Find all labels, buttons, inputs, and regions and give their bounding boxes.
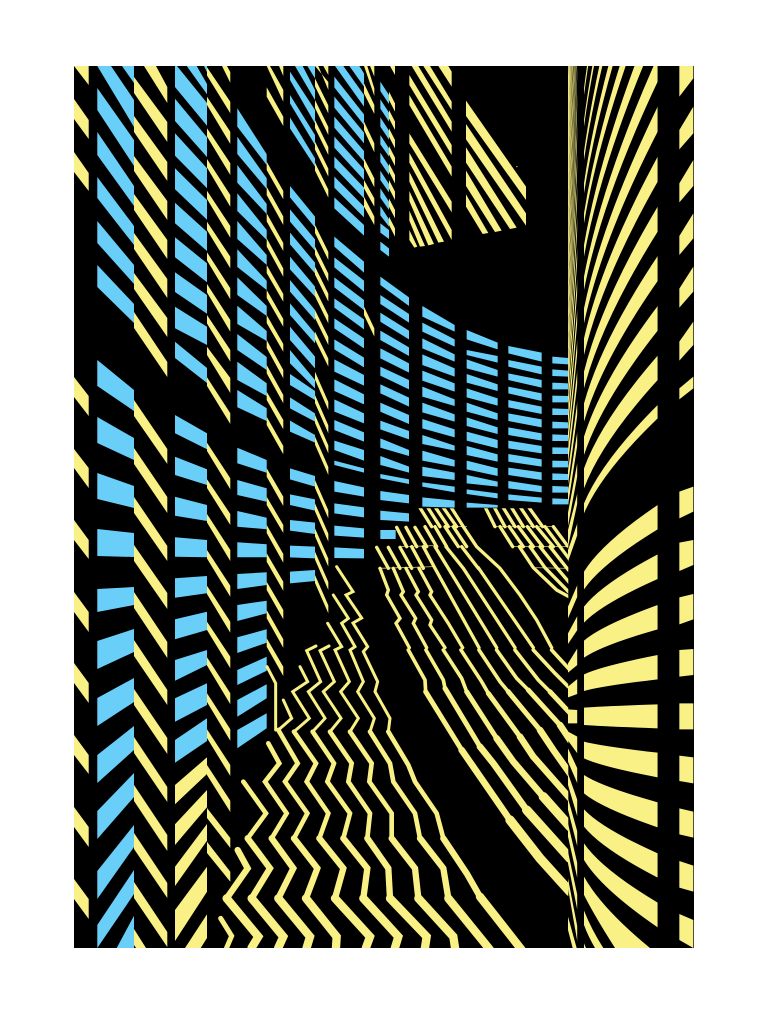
column: blue wall band 1 — [97, 66, 134, 948]
corner column: lower wedges — [568, 493, 577, 948]
column: far-left yellow stripes — [74, 66, 89, 919]
far-right yellow stripes upper — [679, 66, 693, 399]
column: thin yellow stripes band 3 — [267, 66, 283, 676]
column: thin yellow stripes band 4 upper — [315, 66, 328, 367]
column: blue wall band 7 — [422, 306, 455, 508]
column: yellow stripes band 1 — [134, 66, 167, 948]
column: yellow chevrons under blue band 2 — [175, 757, 207, 948]
column: blue wall band 4 — [290, 66, 315, 388]
column: blue wall band 6 lower — [380, 348, 409, 539]
column: thin yellow stripes band 5 — [364, 66, 395, 337]
upper wall: yellow stripe group 1 — [409, 66, 452, 248]
column: blue wall band 9 — [508, 346, 542, 503]
column: blue wall band 5 — [334, 66, 364, 367]
black background panel — [74, 66, 694, 948]
curved wall: fan stripes — [584, 7, 658, 948]
upper wall: yellow stripe group 2 — [466, 101, 526, 234]
column: blue wall band 10 — [552, 357, 568, 504]
column: blue wall band 4 lower — [290, 374, 315, 583]
column: blue wall band 5 lower — [334, 359, 364, 558]
column: thin yellow stripes band 2 — [207, 66, 230, 882]
corner column: thin converging stripes — [568, 66, 577, 526]
column: blue wall band 2 — [175, 66, 207, 763]
far-right yellow stripes lower — [679, 487, 693, 948]
column: blue wall band 3 — [237, 108, 267, 748]
column: blue wall band 6 — [380, 82, 409, 356]
floor: zigzag stripes — [221, 507, 573, 954]
column: thin yellow stripes band 4 lower — [315, 372, 328, 613]
column: blue wall band 8 — [467, 330, 498, 508]
